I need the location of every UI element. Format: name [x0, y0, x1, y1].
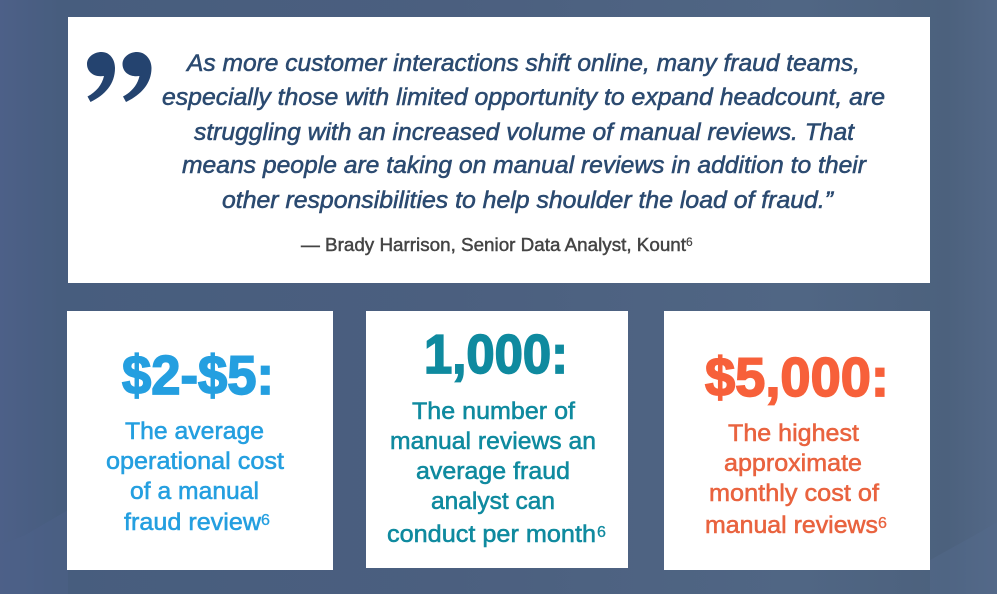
stat description: 6 [261, 512, 270, 529]
quote text [162, 50, 885, 214]
panel: operational cost [67, 311, 333, 570]
stat description [106, 418, 284, 536]
quote text: especially those with limited opportunity to expand headcount, are [162, 84, 885, 111]
quote text: As more customer interactions shift online, many fraud teams, [185, 50, 860, 77]
quote text: other responsibilities to help shoulder the load of fraud.” [222, 187, 835, 214]
panel: quote [68, 17, 930, 283]
stat description: The highest [728, 420, 859, 447]
stat description: manual reviews [705, 512, 878, 539]
stat: 1,000: 1,000: [424, 323, 568, 385]
stat description: fraud review [124, 509, 261, 536]
stat description: The number of [412, 398, 575, 425]
stat description: monthly cost of [709, 480, 879, 507]
quote attribution: — Brady Harrison, Senior Data Analyst, Kount [301, 235, 686, 255]
stat description: 6 [597, 524, 606, 541]
panel: monthly cost [664, 311, 930, 570]
stat description: average fraud [416, 458, 570, 485]
quote attribution: 6 [686, 235, 693, 249]
quote text: means people are taking on manual reviews in addition to their [182, 152, 867, 179]
stat description: of a manual [130, 478, 259, 505]
quote text: struggling with an increased volume of manual reviews. That [194, 119, 855, 146]
stat description: conduct per month [387, 521, 596, 548]
stat description [387, 398, 606, 548]
stat description: approximate [724, 450, 862, 477]
stat description: analyst can [431, 488, 555, 515]
stat description: 6 [878, 515, 887, 532]
stat: $5,000: $5,000: [705, 346, 889, 408]
stat description: The average [125, 418, 264, 445]
stat description [705, 420, 887, 539]
stat: $2-$5: $2-$5: [122, 344, 274, 406]
stat description: operational cost [106, 448, 284, 475]
icon: quotation mark [87, 52, 152, 102]
panel: reviews per month [366, 311, 628, 568]
stat description: manual reviews an [390, 428, 596, 455]
